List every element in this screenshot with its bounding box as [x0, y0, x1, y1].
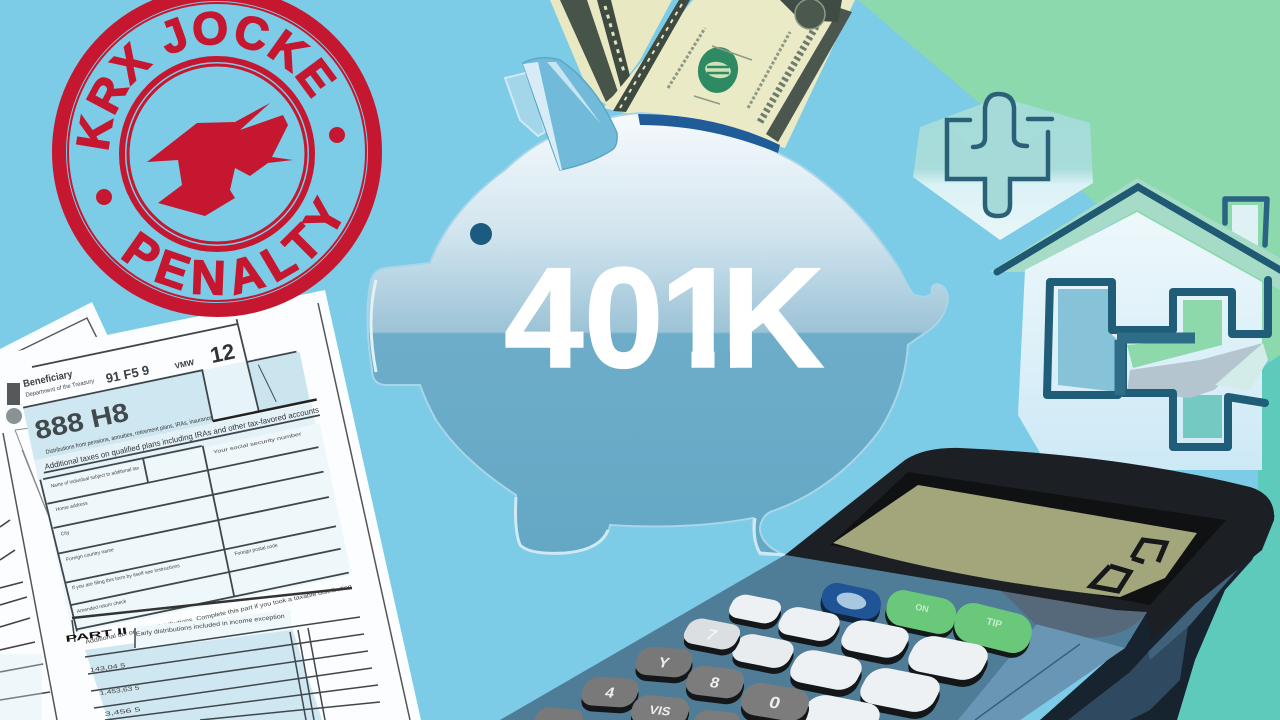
keys: blue and green — [818, 580, 1036, 662]
upper form section: Amended return check — [76, 599, 127, 615]
section heading: PART II — [65, 625, 128, 644]
bill seal — [694, 44, 742, 96]
upper form section: City — [60, 530, 70, 538]
keys: blue and green: TIP — [985, 616, 1003, 631]
lower form section: 143,04 5 — [89, 663, 127, 674]
upper form section: Distributions from pensions, annuities, retirement plans, IRAs, insurance — [45, 415, 213, 456]
side panel — [1068, 627, 1188, 720]
penalty stamp — [52, 0, 382, 317]
background: teal strip — [1170, 355, 1280, 720]
lcd screen — [833, 485, 1197, 597]
stamp emblem — [147, 103, 293, 216]
pig eye — [470, 223, 492, 245]
lcd digit — [1091, 540, 1166, 591]
keys: blue and green: ON — [914, 602, 930, 614]
lower form section: 3,456 5 — [104, 707, 142, 718]
form number: 12 — [208, 339, 237, 368]
lower form section — [65, 588, 380, 720]
upper form section — [14, 306, 356, 648]
keys: grey: VIS — [648, 703, 673, 718]
stamp stars — [96, 127, 345, 205]
keys: grey — [530, 646, 813, 720]
stamp bottom text: PENALTY — [120, 194, 342, 296]
401K label: 401K — [504, 239, 824, 398]
form margin strip — [15, 428, 60, 545]
icon backdrop — [913, 97, 1093, 240]
form heading text: Beneficiary — [22, 369, 74, 390]
keys: grey: Y — [656, 655, 671, 671]
pig body — [367, 113, 948, 555]
snout highlight — [371, 280, 376, 372]
background: green corner — [858, 0, 1280, 370]
upper form section: Foreign postal code — [234, 543, 278, 557]
keys: white: 7 — [703, 627, 720, 644]
roof — [997, 187, 1280, 272]
house wall — [1018, 212, 1262, 470]
coin slot — [638, 114, 780, 153]
keypad deck — [500, 555, 1147, 720]
inner bezel — [830, 472, 1226, 605]
upper form section: If you are filing this form by itself see instructions — [72, 563, 181, 591]
medical cross icon — [913, 94, 1093, 240]
back ear — [505, 72, 545, 136]
form title: 888 H8 — [32, 397, 131, 445]
piggy bank — [367, 58, 948, 555]
cross fills — [1058, 289, 1268, 438]
upper form section: 91 F5 9 — [104, 362, 151, 386]
lower form section: 1,453,63 5 — [99, 685, 141, 697]
front ear — [523, 58, 617, 170]
keys: grey: 4 — [603, 685, 617, 701]
upper form section: Your social security number — [213, 431, 303, 456]
grey deck band — [1000, 590, 1147, 638]
keys: grey: 0 — [767, 693, 783, 712]
roof glow — [990, 178, 1280, 290]
keys: white — [680, 593, 994, 720]
lower form section: Early distributions included in income exception — [136, 614, 285, 638]
side highlight — [1148, 558, 1246, 660]
stamp top text: KRX JOCKE — [76, 11, 338, 150]
keys: grey: 8 — [708, 675, 722, 692]
calculator side — [1040, 515, 1275, 720]
upper form section: Department of the Treasury — [25, 379, 95, 399]
blue keypad panel — [958, 624, 1125, 720]
chimney — [1225, 199, 1267, 250]
upper form section: Additional tax on early distributions. Complete this part if you took a taxable distribution — [85, 584, 352, 646]
upper form section: VMW — [174, 358, 195, 371]
bezel — [785, 448, 1274, 640]
upper form section: Home address — [55, 500, 89, 513]
foot highlights — [516, 497, 785, 555]
upper form section: Additional taxes on qualified plans including IRAs and other tax-favored accounts — [44, 405, 320, 471]
dollar bills — [550, 0, 855, 148]
upper form section: Foreign country name — [66, 547, 115, 563]
back sheet — [0, 302, 112, 400]
front bill — [603, 0, 855, 148]
tax form papers — [0, 290, 421, 720]
back bills — [550, 0, 672, 105]
side sheet lines — [0, 520, 50, 720]
form logo — [6, 383, 22, 424]
form sheet — [0, 290, 421, 720]
upper form section: Name of individual subject to additional tax — [50, 465, 140, 490]
house with cross — [990, 178, 1280, 470]
calculator — [500, 448, 1275, 720]
cross outline — [1047, 280, 1268, 447]
stamp rings — [59, 0, 375, 310]
